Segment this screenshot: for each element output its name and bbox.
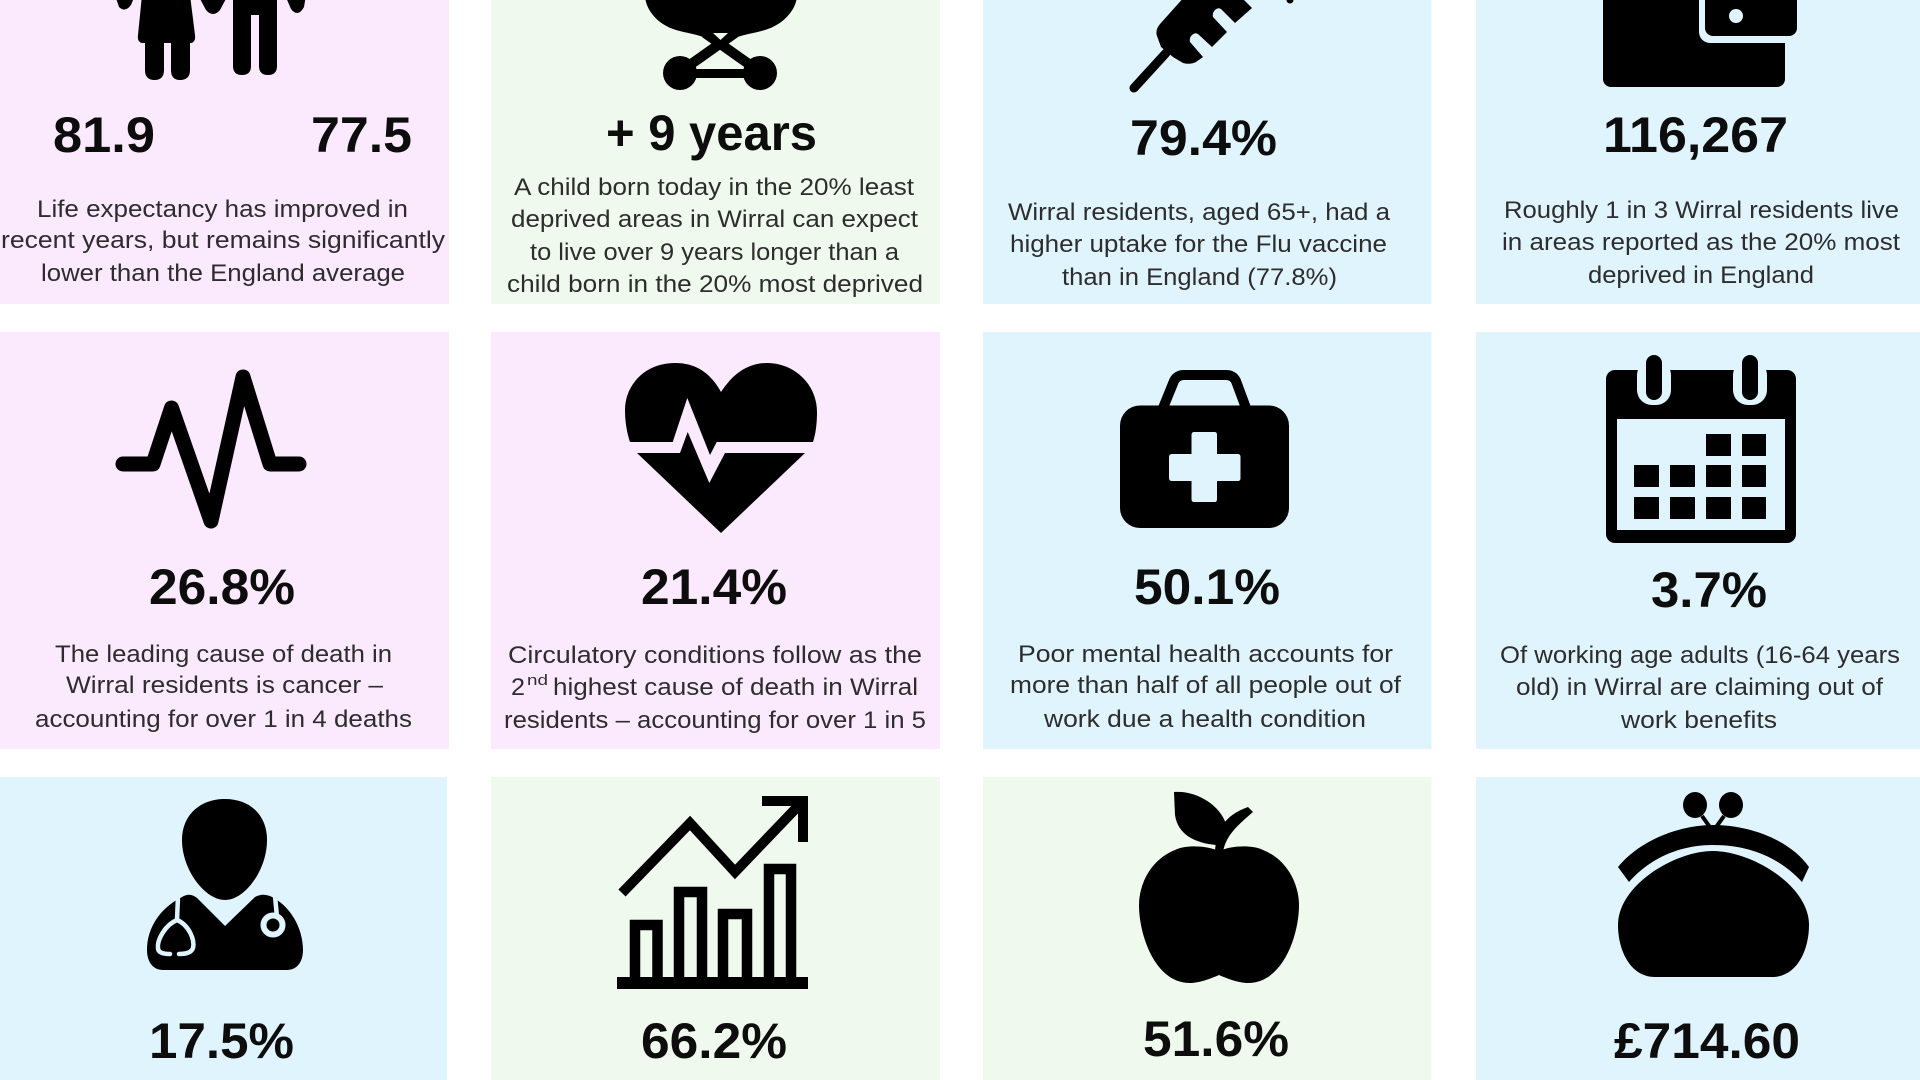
panel: deprived population <box>1476 0 1920 304</box>
panel: circulatory deaths <box>491 332 940 749</box>
icon: woman and man <box>115 0 306 80</box>
description: work benefits <box>1620 707 1777 734</box>
description <box>1502 197 1900 289</box>
panel: doctor statistic <box>0 777 447 1080</box>
description: deprived areas in Wirral can expect <box>511 206 918 233</box>
description: Wirral residents, aged 65+, had a <box>1008 199 1390 226</box>
description: 2 <box>511 674 525 701</box>
description: residents – accounting for over 1 in 5 <box>504 707 926 734</box>
icon: heart with ECG <box>620 363 822 533</box>
description: lower than the England average <box>41 260 405 287</box>
panel: life expectancy <box>0 0 449 304</box>
description: more than half of all people out of <box>1010 672 1401 699</box>
description <box>1010 641 1401 733</box>
icon: apple <box>1139 792 1299 983</box>
description: Of working age adults (16-64 years <box>1500 642 1900 669</box>
description: child born in the 20% most deprived <box>507 271 923 298</box>
description: Circulatory conditions follow as the <box>508 642 922 669</box>
value: 79.4%: 79.4% <box>1130 110 1277 166</box>
description <box>504 642 926 734</box>
value: 66.2%: 66.2% <box>641 1013 787 1069</box>
panel: flu vaccine <box>983 0 1432 304</box>
description: higher uptake for the Flu vaccine <box>1010 231 1387 258</box>
panel: out of work benefits <box>1476 332 1920 749</box>
value: 17.5%: 17.5% <box>149 1013 294 1069</box>
panel: mental health <box>983 332 1432 749</box>
description <box>1500 642 1900 734</box>
value: 26.8%: 26.8% <box>149 559 295 615</box>
description: to live over 9 years longer than a <box>530 239 899 266</box>
description: accounting for over 1 in 4 deaths <box>35 706 412 733</box>
description: Wirral residents is cancer – <box>66 672 383 699</box>
description: old) in Wirral are claiming out of <box>1516 674 1883 701</box>
description: highest cause of death in Wirral <box>553 674 918 701</box>
value: 3.7%: 3.7% <box>1651 562 1767 618</box>
icon: doctor with stethoscope <box>147 799 303 970</box>
panel: purse statistic <box>1476 777 1920 1080</box>
description <box>507 174 923 298</box>
value: 81.9: 81.9 <box>53 107 155 163</box>
panel: apple statistic <box>983 777 1432 1080</box>
panel: deprivation life gap <box>491 0 940 304</box>
icon: rising bar chart <box>617 801 808 989</box>
value: 77.5: 77.5 <box>311 107 412 163</box>
icon: wallet <box>1603 0 1801 87</box>
value: 50.1%: 50.1% <box>1134 559 1280 615</box>
description <box>35 641 412 733</box>
description: work due a health condition <box>1043 706 1366 733</box>
panel: trend statistic <box>491 777 940 1080</box>
icon: coin purse <box>1618 792 1809 977</box>
description: Poor mental health accounts for <box>1018 641 1393 668</box>
description: than in England (77.8%) <box>1062 264 1337 291</box>
description <box>1 196 446 287</box>
value: 21.4%: 21.4% <box>641 559 787 615</box>
value: + 9 years: + 9 years <box>606 105 817 161</box>
icon: medical bag <box>1120 375 1289 528</box>
icon: syringe <box>1134 0 1294 88</box>
description: nd <box>527 672 548 689</box>
value: 116,267: 116,267 <box>1603 107 1788 163</box>
icon: calendar <box>1606 355 1796 543</box>
value: £714.60: £714.60 <box>1614 1013 1800 1069</box>
panel: cancer deaths <box>0 332 449 749</box>
description: in areas reported as the 20% most <box>1502 229 1900 256</box>
icon: pram <box>645 0 797 90</box>
description <box>1008 199 1390 291</box>
description: A child born today in the 20% least <box>514 174 914 201</box>
description: deprived in England <box>1588 262 1814 289</box>
description: Life expectancy has improved in <box>37 196 408 223</box>
icon: pulse line <box>123 377 299 521</box>
description: Roughly 1 in 3 Wirral residents live <box>1504 197 1899 224</box>
description: recent years, but remains significantly <box>1 227 446 254</box>
description: The leading cause of death in <box>55 641 392 668</box>
value: 51.6%: 51.6% <box>1143 1011 1289 1067</box>
